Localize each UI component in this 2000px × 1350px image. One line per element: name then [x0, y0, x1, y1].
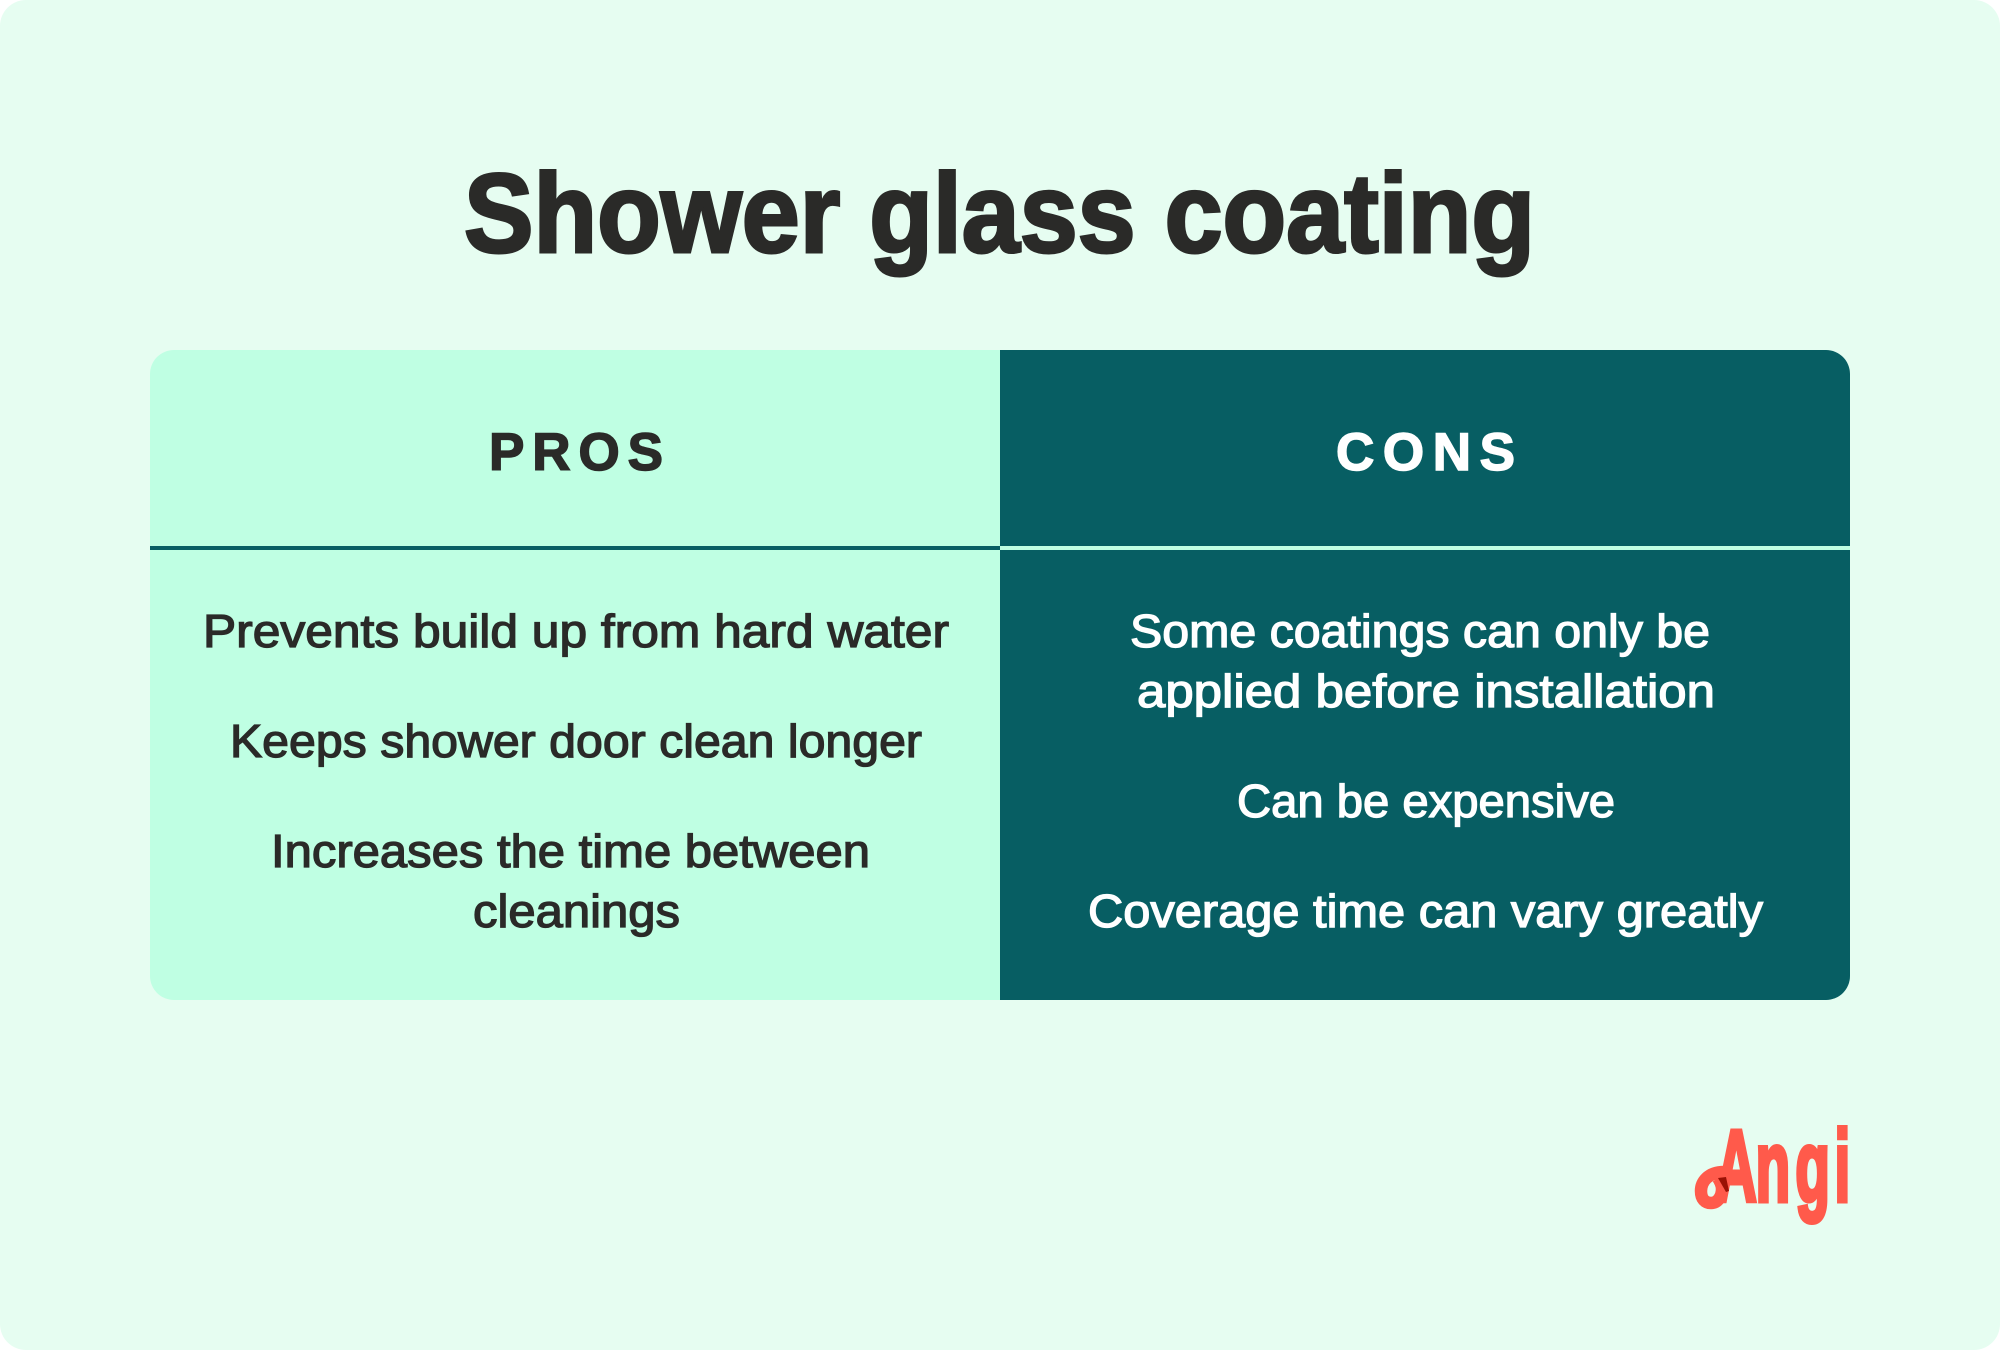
pros list: Keeps shower door clean longer	[230, 715, 922, 767]
logo: Angi: Angi	[1716, 1111, 1850, 1223]
pros divider	[150, 546, 1000, 550]
panel: cons	[1000, 350, 1850, 1000]
pros list: Prevents build up from hard water	[203, 605, 949, 657]
pros list: Increases the time between	[271, 825, 870, 877]
cons divider	[1000, 546, 1850, 550]
title: Shower glass coating	[464, 151, 1535, 276]
cons heading: CONS	[1336, 423, 1515, 482]
cons list: applied before installation	[1137, 665, 1715, 717]
cons list: Coverage time can vary greatly	[1088, 885, 1763, 937]
pros list	[203, 605, 949, 937]
cons list: Can be expensive	[1237, 775, 1615, 827]
pros heading: PROS	[489, 423, 663, 482]
cons list	[1088, 605, 1763, 937]
pros list: cleanings	[473, 885, 680, 937]
panel: pros	[150, 350, 1000, 1000]
cons list: Some coatings can only be	[1130, 605, 1710, 657]
